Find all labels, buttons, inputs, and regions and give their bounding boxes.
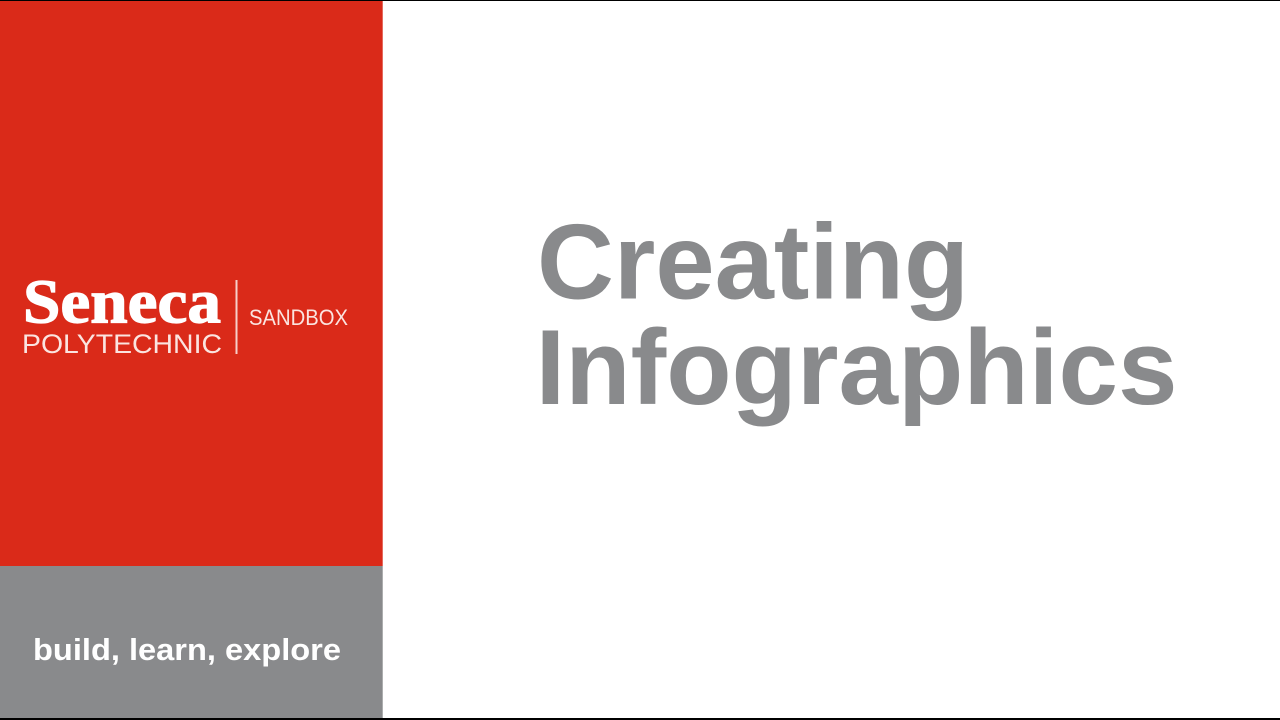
logo wordmark: Seneca: Seneca	[23, 268, 221, 336]
logo label: Sandbox: SANDBOX	[249, 305, 348, 330]
panel: red brand block	[0, 0, 383, 566]
title: Creating	[537, 202, 969, 322]
tagline: build, learn, explore	[33, 632, 341, 667]
logo: Seneca Polytechnic Sandbox	[22, 268, 348, 359]
panel: grey tagline block	[0, 566, 383, 720]
logo subtext: Polytechnic: POLYTECHNIC	[22, 329, 222, 359]
title: Infographics	[536, 308, 1178, 427]
logo divider	[236, 280, 238, 354]
title	[536, 202, 1178, 427]
